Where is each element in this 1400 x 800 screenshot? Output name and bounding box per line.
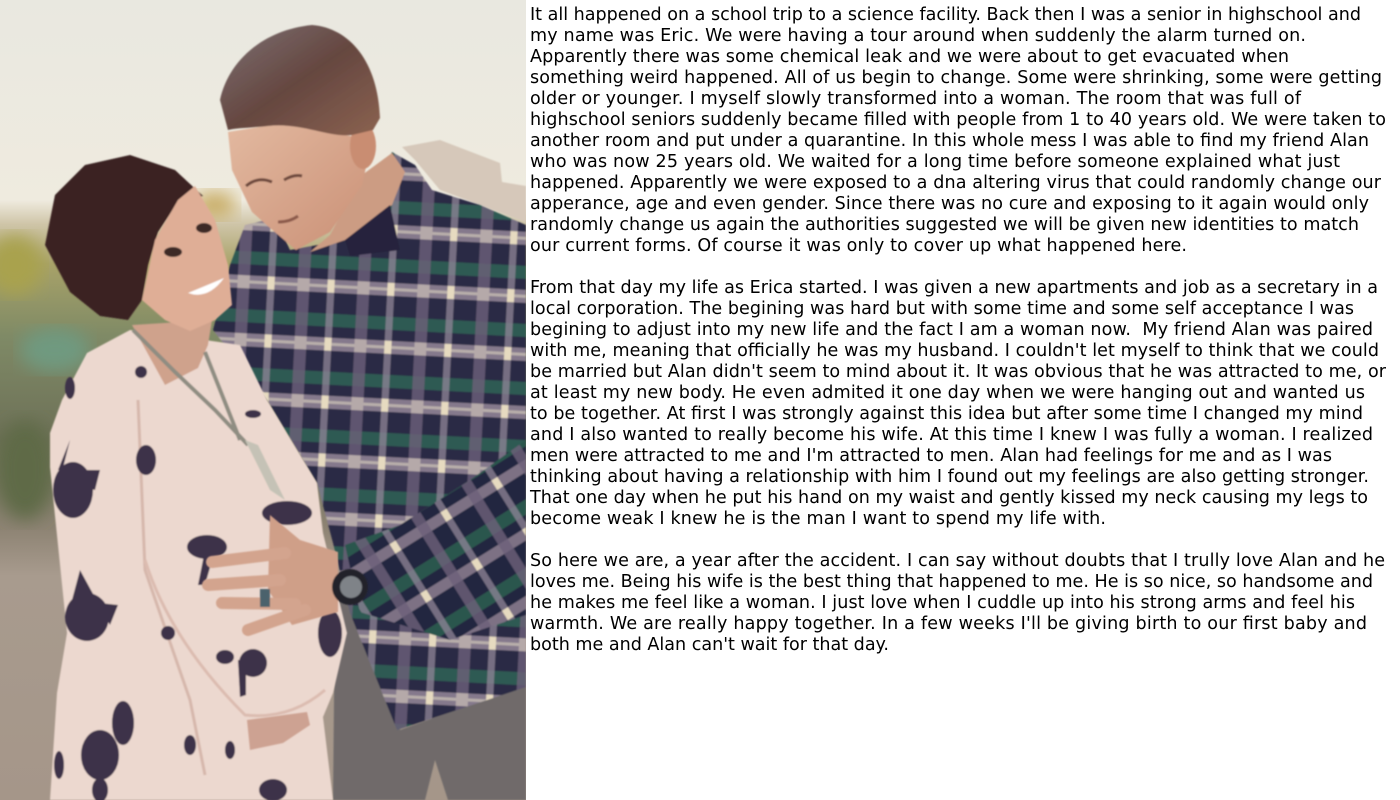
watch (332, 569, 368, 605)
belly fold (145, 560, 325, 716)
paragraph 1: It all happened on a school trip to a science facility. Back then I was a senior in highschool and (530, 5, 1361, 25)
paragraph 2: with me, meaning that officially he was my husband. I couldn't let myself to think that we could (530, 341, 1379, 361)
paragraph 2: to be together. At first I was strongly against this idea but after some time I changed my mind (530, 404, 1363, 424)
man (213, 25, 526, 800)
paragraph 1: who was now 25 years old. We waited for a long time before someone explained what just (530, 152, 1340, 172)
paragraph 1: older or younger. I myself slowly transformed into a woman. The room that was full of (530, 89, 1302, 109)
paragraph 2: and I also wanted to really become his wife. At this time I knew I was fully a woman. I realized (530, 425, 1373, 445)
paragraph 2: men were attracted to me and I'm attracted to men. Alan had feelings for me and as I was (530, 446, 1332, 466)
ear (350, 123, 376, 169)
florals (53, 366, 342, 800)
paragraph 2: begining to adjust into my new life and the fact I am a woman now. My friend Alan was paired (530, 320, 1373, 340)
plaid shirt (213, 152, 526, 730)
paragraph 1: highschool seniors suddenly became filled with people from 1 to 40 years old. We were taken to (530, 110, 1386, 130)
paragraph 3: he makes me feel like a woman. I just love when I cuddle up into his strong arms and feel his (530, 593, 1355, 613)
paragraph 3: warmth. We are really happy together. In a few weeks I'll be giving birth to our first baby and (530, 614, 1367, 634)
paragraph 2: That one day when he put his hand on my waist and gently kissed my neck causing my legs to (529, 488, 1368, 508)
paragraph 1: our current forms. Of course it was only to cover up what happened here. (530, 236, 1187, 256)
hands and watch (208, 515, 368, 750)
paragraph 2: become weak I knew he is the man I want to spend my life with. (530, 509, 1106, 529)
paragraph 1: happened. Apparently we were exposed to a dna altering virus that could randomly change our (530, 173, 1382, 193)
dress (50, 330, 347, 800)
man's hand (208, 515, 338, 630)
second eye (196, 223, 212, 233)
woman (45, 155, 347, 800)
paragraph 3: loves me. Being his wife is the best thing that happened to me. He is so nice, so handsome and (530, 572, 1373, 592)
hair (45, 155, 203, 320)
watch dial (340, 576, 362, 598)
paragraph 1: randomly change us again the authorities suggested we will be given new identities to match (530, 215, 1359, 235)
collar (345, 205, 400, 256)
hair (220, 25, 380, 135)
face (142, 186, 232, 331)
paragraph 1: apperance, age and even gender. Since there was no cure and exposing to it again would only (530, 194, 1369, 214)
paragraph 3: So here we are, a year after the accident. I can say without doubts that I trully love Alan and he (530, 551, 1385, 571)
paragraph 2: be married but Alan didn't seem to mind about it. It was obvious that he was attracted to me, or (530, 362, 1387, 382)
paragraph 1: something weird happened. All of us begin to change. Some were shrinking, some were getting (530, 68, 1382, 88)
paragraph 1: another room and put under a quarantine. In this whole mess I was able to find my friend Alan (530, 131, 1369, 151)
paragraph 2: thinking about having a relationship with him I found out my feelings are also getting stronger. (530, 467, 1369, 487)
paragraph 3 (530, 551, 1385, 655)
pendant (245, 440, 285, 500)
paragraph 2: at least my new body. He even admited it one day when we were hanging out and wanted us (530, 383, 1365, 403)
paragraph 1: Apparently there was some chemical leak and we were about to get evacuated when (530, 47, 1289, 67)
eyes and mouth (246, 176, 302, 186)
woman's hand (247, 712, 310, 750)
sleeve (345, 440, 526, 640)
paragraph 2: local corporation. The begining was hard but with some time and some self acceptance I was (530, 299, 1354, 319)
paragraph 1 (530, 5, 1386, 256)
face (228, 122, 372, 250)
background scenery (0, 0, 526, 800)
photo: couple portrait (0, 0, 526, 800)
neck and chest (132, 320, 212, 385)
paragraph 3: both me and Alan can't wait for that day. (530, 635, 889, 655)
eyes (164, 247, 182, 257)
neck (310, 153, 405, 252)
paragraph 2 (529, 278, 1387, 529)
necklace (133, 330, 248, 445)
ring (260, 589, 270, 607)
paragraph 2: From that day my life as Erica started. I was given a new apartments and job as a secretary in a (530, 278, 1378, 298)
trousers (333, 600, 526, 800)
smile (188, 278, 224, 295)
sleeve fold (138, 400, 205, 775)
paragraph 1: my name was Eric. We were having a tour around when suddenly the alarm turned on. (530, 26, 1306, 46)
